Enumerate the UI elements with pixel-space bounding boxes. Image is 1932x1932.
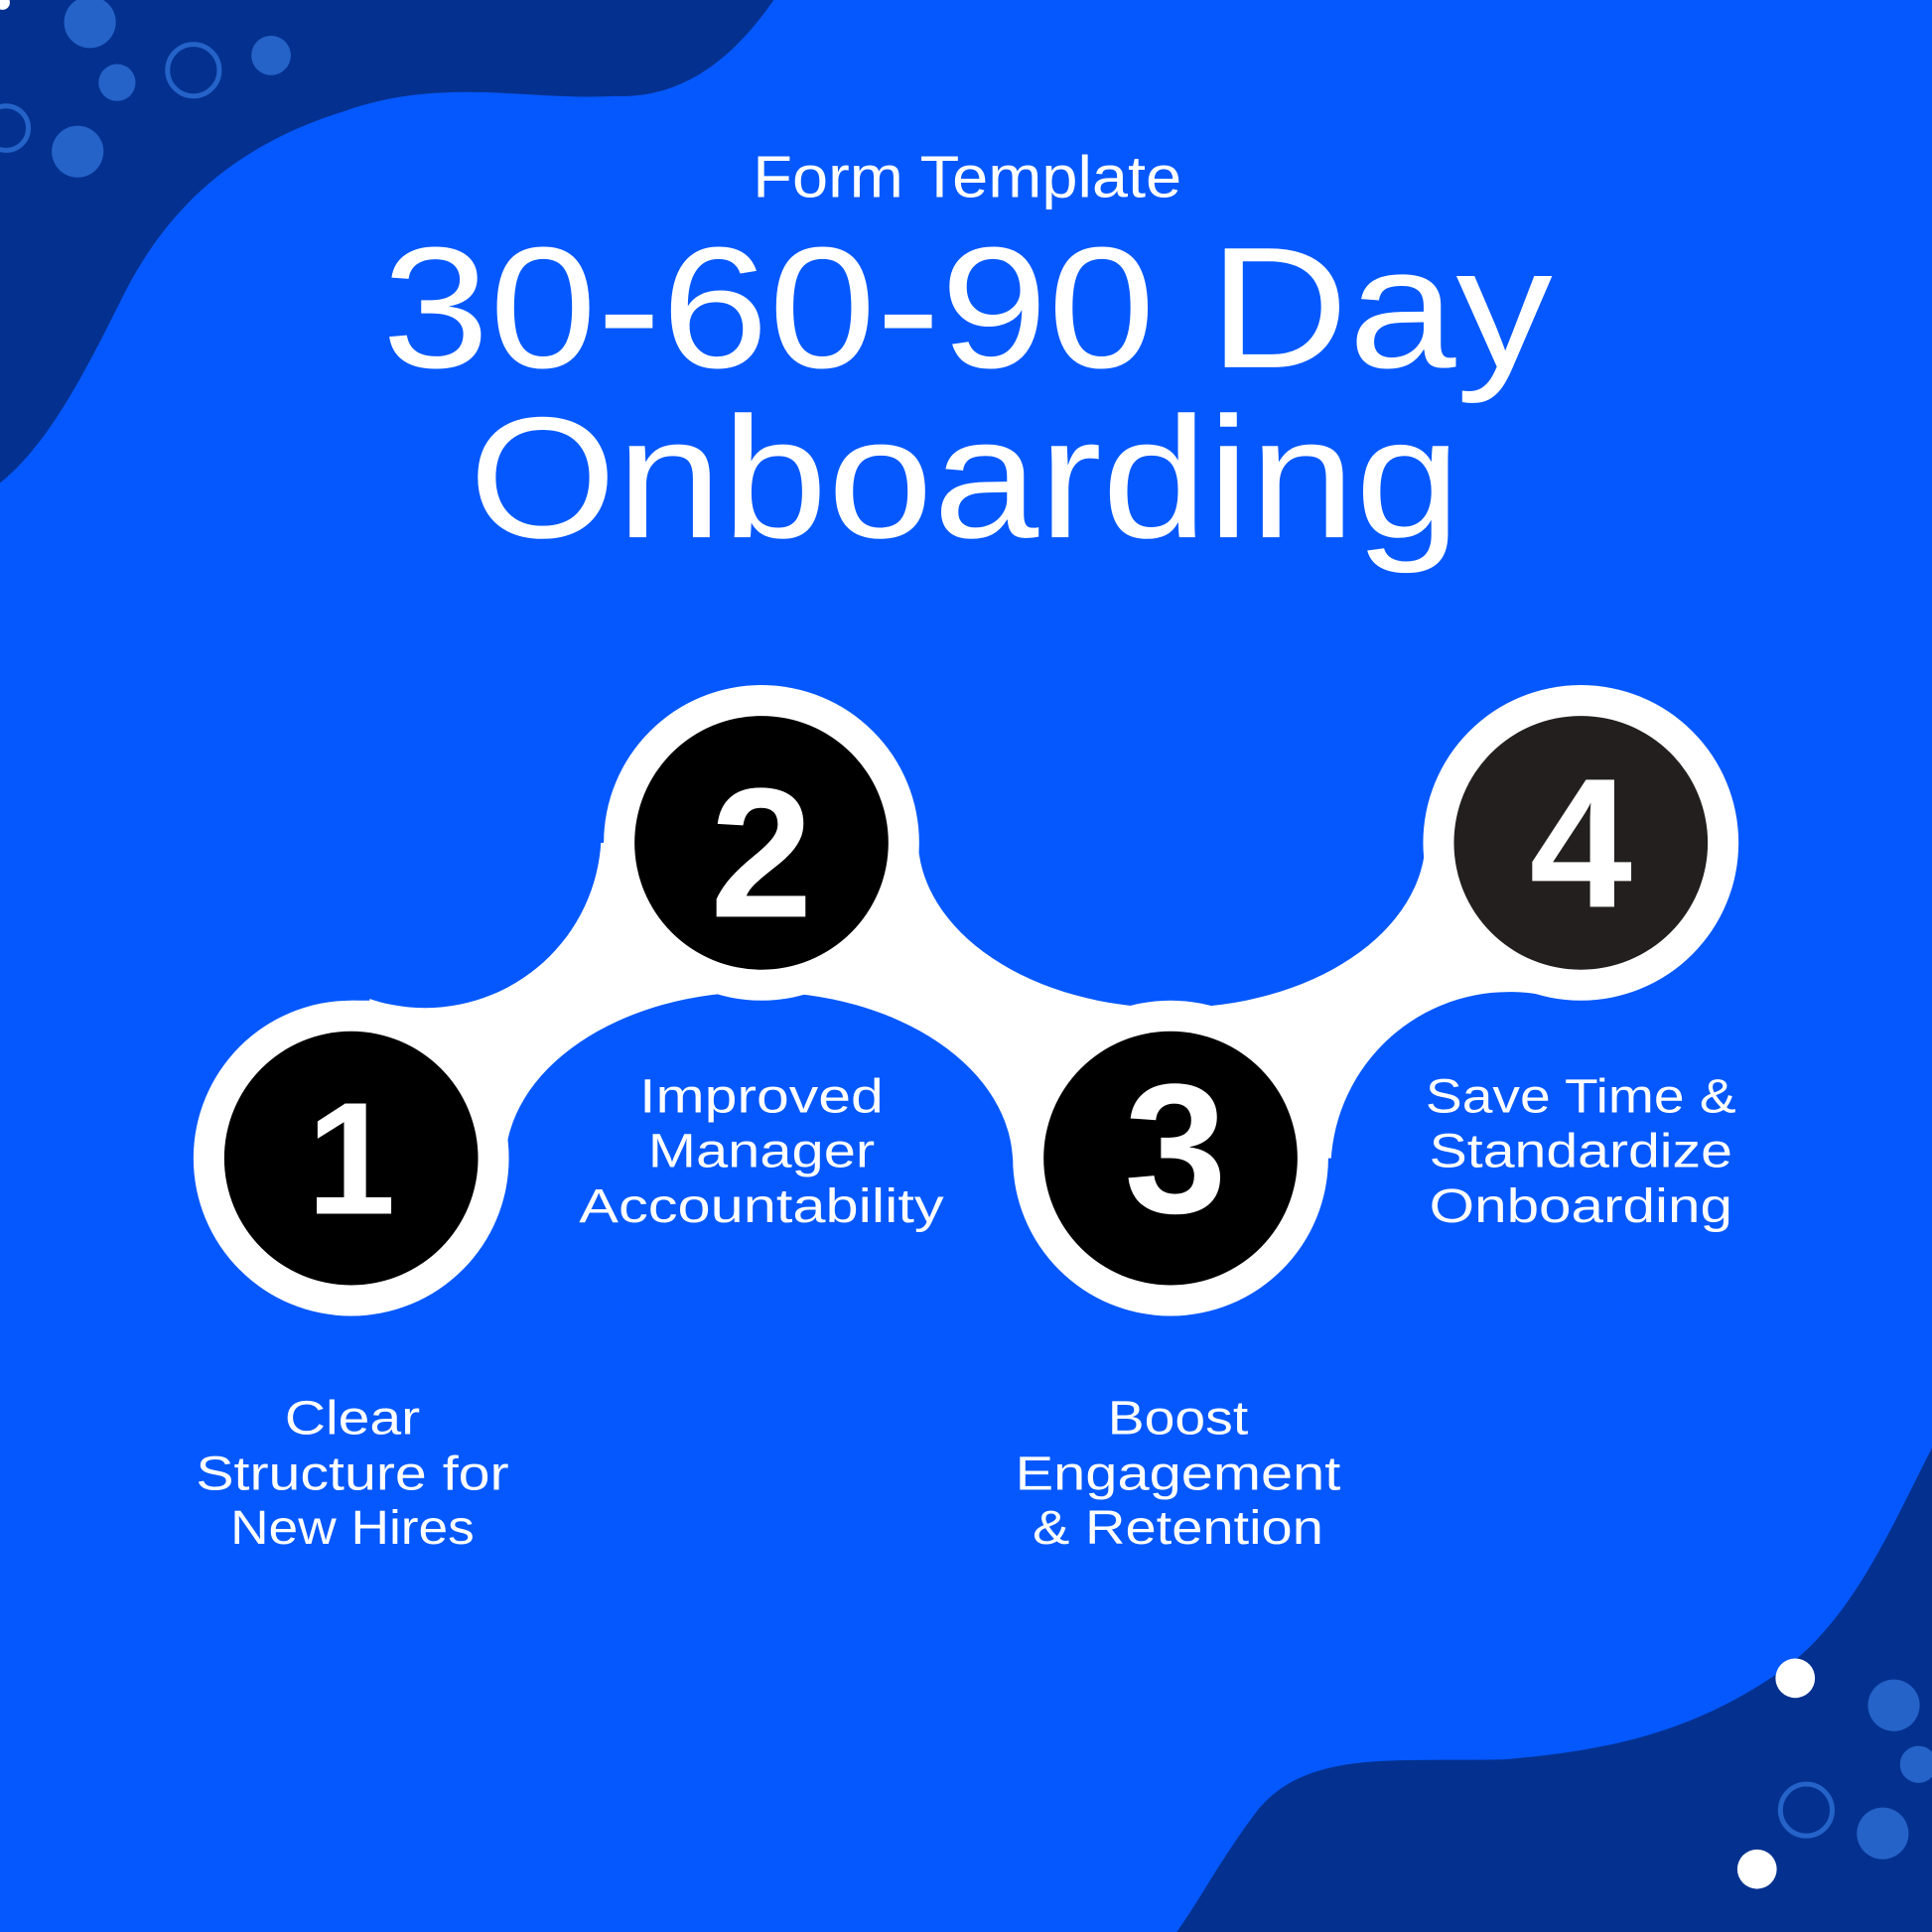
label 4: Standardize	[1430, 1124, 1732, 1177]
label 2	[579, 1070, 945, 1233]
label 3: Engagement	[1016, 1447, 1341, 1500]
step 1 circle: 1	[307, 1069, 396, 1248]
subtitle: Form Template	[753, 144, 1181, 210]
label 1	[196, 1392, 509, 1555]
step 2 circle	[604, 685, 919, 1001]
decorative blob: top-left	[0, 0, 773, 483]
title: Onboarding	[469, 381, 1460, 574]
label 4	[1426, 1070, 1736, 1233]
label 4: Onboarding	[1430, 1179, 1732, 1233]
label 3: & Retention	[1033, 1501, 1323, 1555]
label 1: Clear	[285, 1392, 420, 1446]
label 1: Structure for	[196, 1447, 509, 1500]
label 3	[1016, 1392, 1341, 1555]
label 2: Accountability	[579, 1179, 945, 1233]
label 2: Improved	[639, 1070, 884, 1124]
label 2: Manager	[648, 1124, 875, 1177]
label 4: Save Time &	[1426, 1070, 1736, 1124]
label 1: New Hires	[230, 1501, 475, 1555]
step 4 circle: 4	[1530, 740, 1632, 946]
snake connector: white path with four steps	[194, 655, 1738, 1349]
title: 30-60-90 Day	[382, 211, 1553, 404]
title	[382, 211, 1553, 574]
step 2 circle: 2	[710, 750, 813, 956]
step 3 circle: 3	[1124, 1045, 1227, 1252]
step 3 circle	[1013, 1001, 1328, 1315]
step 4 circle	[1423, 685, 1738, 1001]
decorative blob: bottom-right	[1176, 1448, 1932, 1932]
label 3: Boost	[1108, 1392, 1249, 1446]
step 1 circle	[194, 1001, 509, 1315]
